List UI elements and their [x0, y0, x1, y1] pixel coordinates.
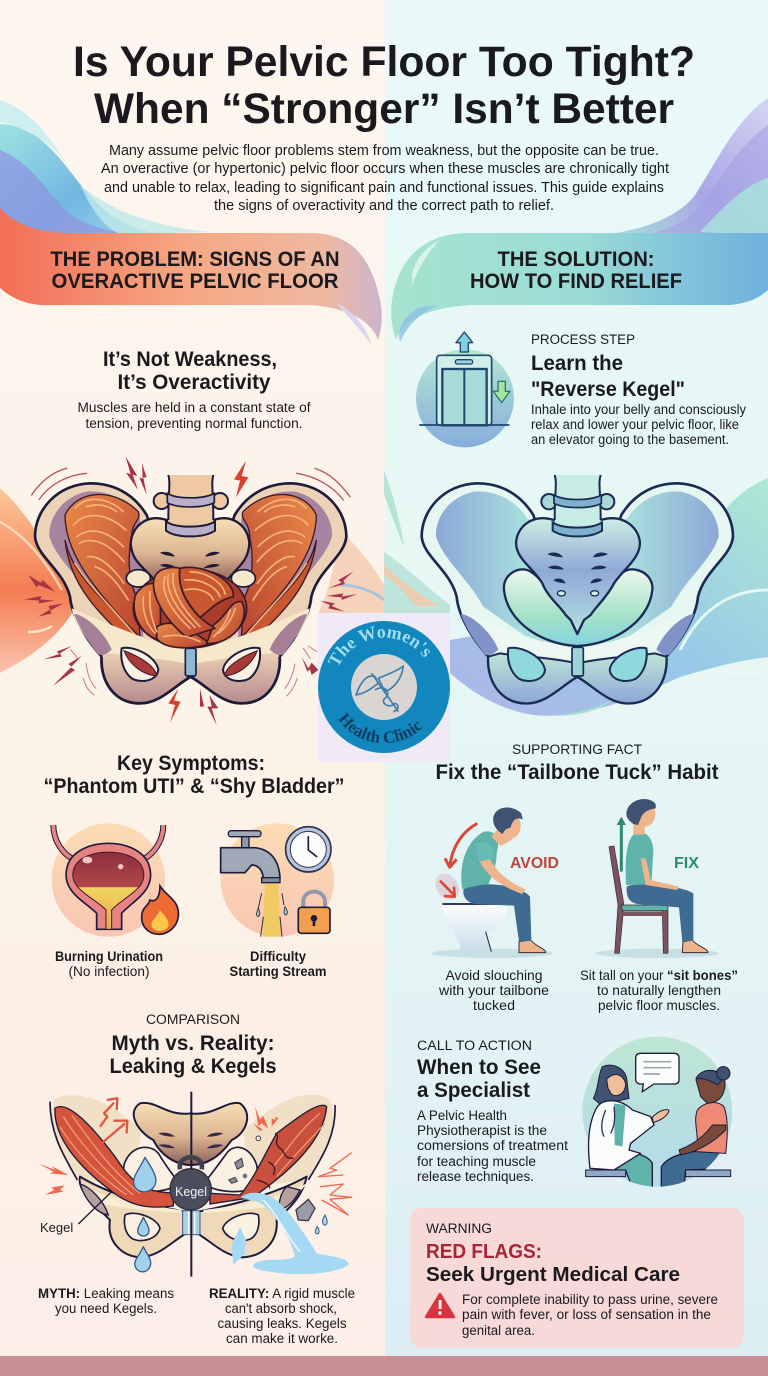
icon: tap, clock, lock [221, 823, 334, 937]
text: reverse kegel step: Inhale into your belly and consciously [531, 402, 746, 417]
illustration: consultation [582, 1037, 732, 1188]
divider [188, 1092, 194, 1277]
background: right cool panel [385, 0, 768, 1376]
labels: symptoms: (No infection) [68, 964, 150, 979]
text: reverse kegel step: PROCESS STEP [531, 332, 635, 347]
text: call to action: for teaching muscle [417, 1154, 536, 1169]
heading: key symptoms [44, 752, 344, 798]
chairs [586, 1170, 731, 1177]
text: reverse kegel step [531, 332, 746, 447]
pubic symphysis [185, 648, 196, 676]
speech bubble [636, 1053, 679, 1092]
text: avoid caption [438, 967, 549, 1013]
intro text: An overactive (or hypertonic) pelvic floor occurs when these muscles are chronically tight [101, 160, 670, 177]
text: reality: can make it worke. [226, 1331, 338, 1346]
patient [696, 1071, 725, 1105]
panel: problem banner: OVERACTIVE PELVIC FLOOR [52, 269, 339, 293]
icon: warning triangle [426, 1294, 454, 1317]
pain bolts [24, 456, 357, 725]
intro text: Many assume pelvic floor problems stem from weakness, but the opposite can be true. [109, 142, 659, 159]
vertebra [154, 475, 228, 536]
title: Is Your Pelvic Floor Too Tight? [73, 38, 695, 86]
symphysis [183, 1211, 200, 1235]
footer band [0, 1356, 768, 1376]
text: call to action: A Pelvic Health [417, 1108, 507, 1123]
text: kettlebell label: Kegel [175, 1185, 207, 1199]
illustration: fix posture [596, 799, 719, 958]
text: fix caption [580, 967, 738, 1013]
heading: tailbone tuck: SUPPORTING FACT [512, 742, 642, 757]
text: kegel side label: Kegel [40, 1220, 73, 1235]
label: fix: FIX [674, 855, 700, 872]
panel: solution banner [391, 233, 768, 342]
text: not weakness description [78, 400, 311, 431]
text: myth [38, 1286, 174, 1316]
heading: not weakness [103, 347, 277, 394]
panel: solution banner: HOW TO FIND RELIEF [470, 269, 682, 293]
heading: comparison: Myth vs. Reality: [112, 1032, 274, 1055]
text: reverse kegel step: relax and lower your pelvic floor, like [531, 417, 739, 432]
text: call to action: Physiotherapist is the [417, 1123, 547, 1138]
myth muscle [55, 1107, 173, 1207]
vertebra [541, 475, 614, 536]
labels: symptoms: Burning Urination [55, 949, 163, 964]
text: not weakness description: tension, preventing normal function. [86, 416, 302, 431]
holes [124, 1213, 160, 1241]
text: fix caption: Sit tall on your “sit bones” [580, 967, 738, 983]
text: call to action: When to See [417, 1055, 541, 1079]
heading: key symptoms: “Phantom UTI” & “Shy Bladder” [44, 775, 344, 798]
pain bolts [38, 1107, 278, 1195]
icon: burning bladder [52, 823, 178, 937]
text: not weakness description: Muscles are held in a constant state of [78, 400, 311, 415]
red arrows [100, 1098, 127, 1143]
panel: red flags warning: pain with fever, or loss of sensation in the [462, 1307, 711, 1322]
panel: red flags warning: genital area. [462, 1323, 535, 1338]
text: reality: can't absorb shock, [225, 1301, 337, 1316]
text: call to action: a Specialist [417, 1078, 530, 1102]
intro text: the signs of overactivity and the correct path to relief. [214, 197, 554, 214]
text: reverse kegel step: Learn the [531, 351, 623, 375]
kettlebell [170, 1157, 211, 1210]
pelvic cavity [504, 569, 652, 646]
icon: elevator [416, 332, 514, 447]
illustration: myth vs reality pelvis [38, 1092, 352, 1277]
text: reality: REALITY: A rigid muscle [209, 1286, 355, 1301]
heading: tailbone tuck: Fix the “Tailbone Tuck” Habit [436, 761, 718, 784]
panel: problem banner [0, 208, 382, 345]
sacrum [516, 518, 640, 634]
decorative flow: left side fire [0, 488, 384, 673]
text: call to action: release techniques. [417, 1169, 534, 1184]
logo: The Women's Health Clinic [318, 613, 450, 762]
heading: not weakness: It’s Overactivity [118, 370, 271, 394]
left half of pelvis [35, 483, 191, 703]
labels: symptoms [55, 949, 326, 979]
labels: symptoms: Difficulty [250, 949, 306, 964]
text: avoid caption: with your tailbone [438, 982, 549, 998]
heading: comparison: Leaking & Kegels [110, 1055, 276, 1078]
label: avoid: AVOID [510, 855, 559, 872]
water drops [134, 1157, 156, 1272]
heading: tailbone tuck [436, 742, 718, 784]
sacrum [131, 518, 249, 583]
sacrum [124, 1147, 180, 1192]
heading: key symptoms: Key Symptoms: [117, 752, 265, 775]
text: fix caption: to naturally lengthen [597, 982, 721, 998]
text: call to action: comersions of treatment [417, 1138, 568, 1153]
title [73, 38, 695, 133]
heading: not weakness: It’s Not Weakness, [103, 347, 277, 371]
doctor [593, 1065, 629, 1105]
text: call to action [417, 1038, 568, 1184]
right half of pelvis (mirror) [191, 483, 346, 703]
decorative flow: right side water [384, 470, 768, 716]
panel: red flags warning [410, 1208, 744, 1348]
muscle knot [133, 567, 247, 648]
panel: red flags warning: For complete inability to pass urine, severe [462, 1292, 718, 1307]
panel: problem banner: THE PROBLEM: SIGNS OF AN [50, 247, 340, 271]
text: call to action: CALL TO ACTION [417, 1038, 532, 1053]
text: myth: you need Kegels. [55, 1301, 157, 1316]
text: reality [209, 1286, 355, 1346]
icon: caduceus [356, 666, 403, 712]
panel: red flags warning: WARNING [426, 1221, 492, 1236]
heading: comparison: COMPARISON [146, 1012, 240, 1027]
title: When “Stronger” Isn’t Better [94, 85, 674, 133]
sacral foramina [160, 552, 220, 568]
water leak [241, 1193, 348, 1274]
background: left warm panel [0, 0, 385, 1376]
logo: The Women's Health Clinic: The Women's [328, 626, 430, 666]
decorative swirl: top left [0, 100, 210, 240]
reality muscle [210, 1105, 327, 1204]
text: myth: MYTH: Leaking means [38, 1286, 174, 1301]
text: reality: causing leaks. Kegels [218, 1316, 347, 1331]
intro text: and unable to relax, leading to significant pain and functional issues. This guide explains [104, 179, 664, 196]
logo: The Women's Health Clinic: Health Clinic [338, 712, 422, 743]
illustration: tense pelvis with knotted muscle [24, 456, 357, 725]
illustration: avoid posture [431, 808, 553, 958]
panel: red flags warning: RED FLAGS: [426, 1241, 542, 1263]
text: fix caption: pelvic floor muscles. [598, 997, 720, 1013]
pubic symphysis [572, 647, 583, 676]
panel: solution banner: THE SOLUTION: [498, 247, 654, 271]
text: avoid caption: Avoid slouching [446, 967, 542, 983]
text: reverse kegel step: "Reverse Kegel" [531, 377, 685, 401]
motion lines [32, 468, 350, 696]
panel: red flags warning: Seek Urgent Medical Care [426, 1264, 680, 1286]
labels: symptoms: Starting Stream [230, 964, 326, 979]
decorative swirl: top right [610, 98, 768, 240]
text: reverse kegel step: an elevator going to the basement. [531, 432, 729, 447]
rocks [296, 1199, 315, 1221]
illustration: relaxed pelvis [422, 475, 733, 703]
heading: comparison [110, 1012, 276, 1078]
kegel pointer [78, 1192, 112, 1224]
sacral foramina [547, 552, 608, 583]
text: avoid caption: tucked [473, 997, 515, 1013]
intro text [101, 142, 670, 214]
